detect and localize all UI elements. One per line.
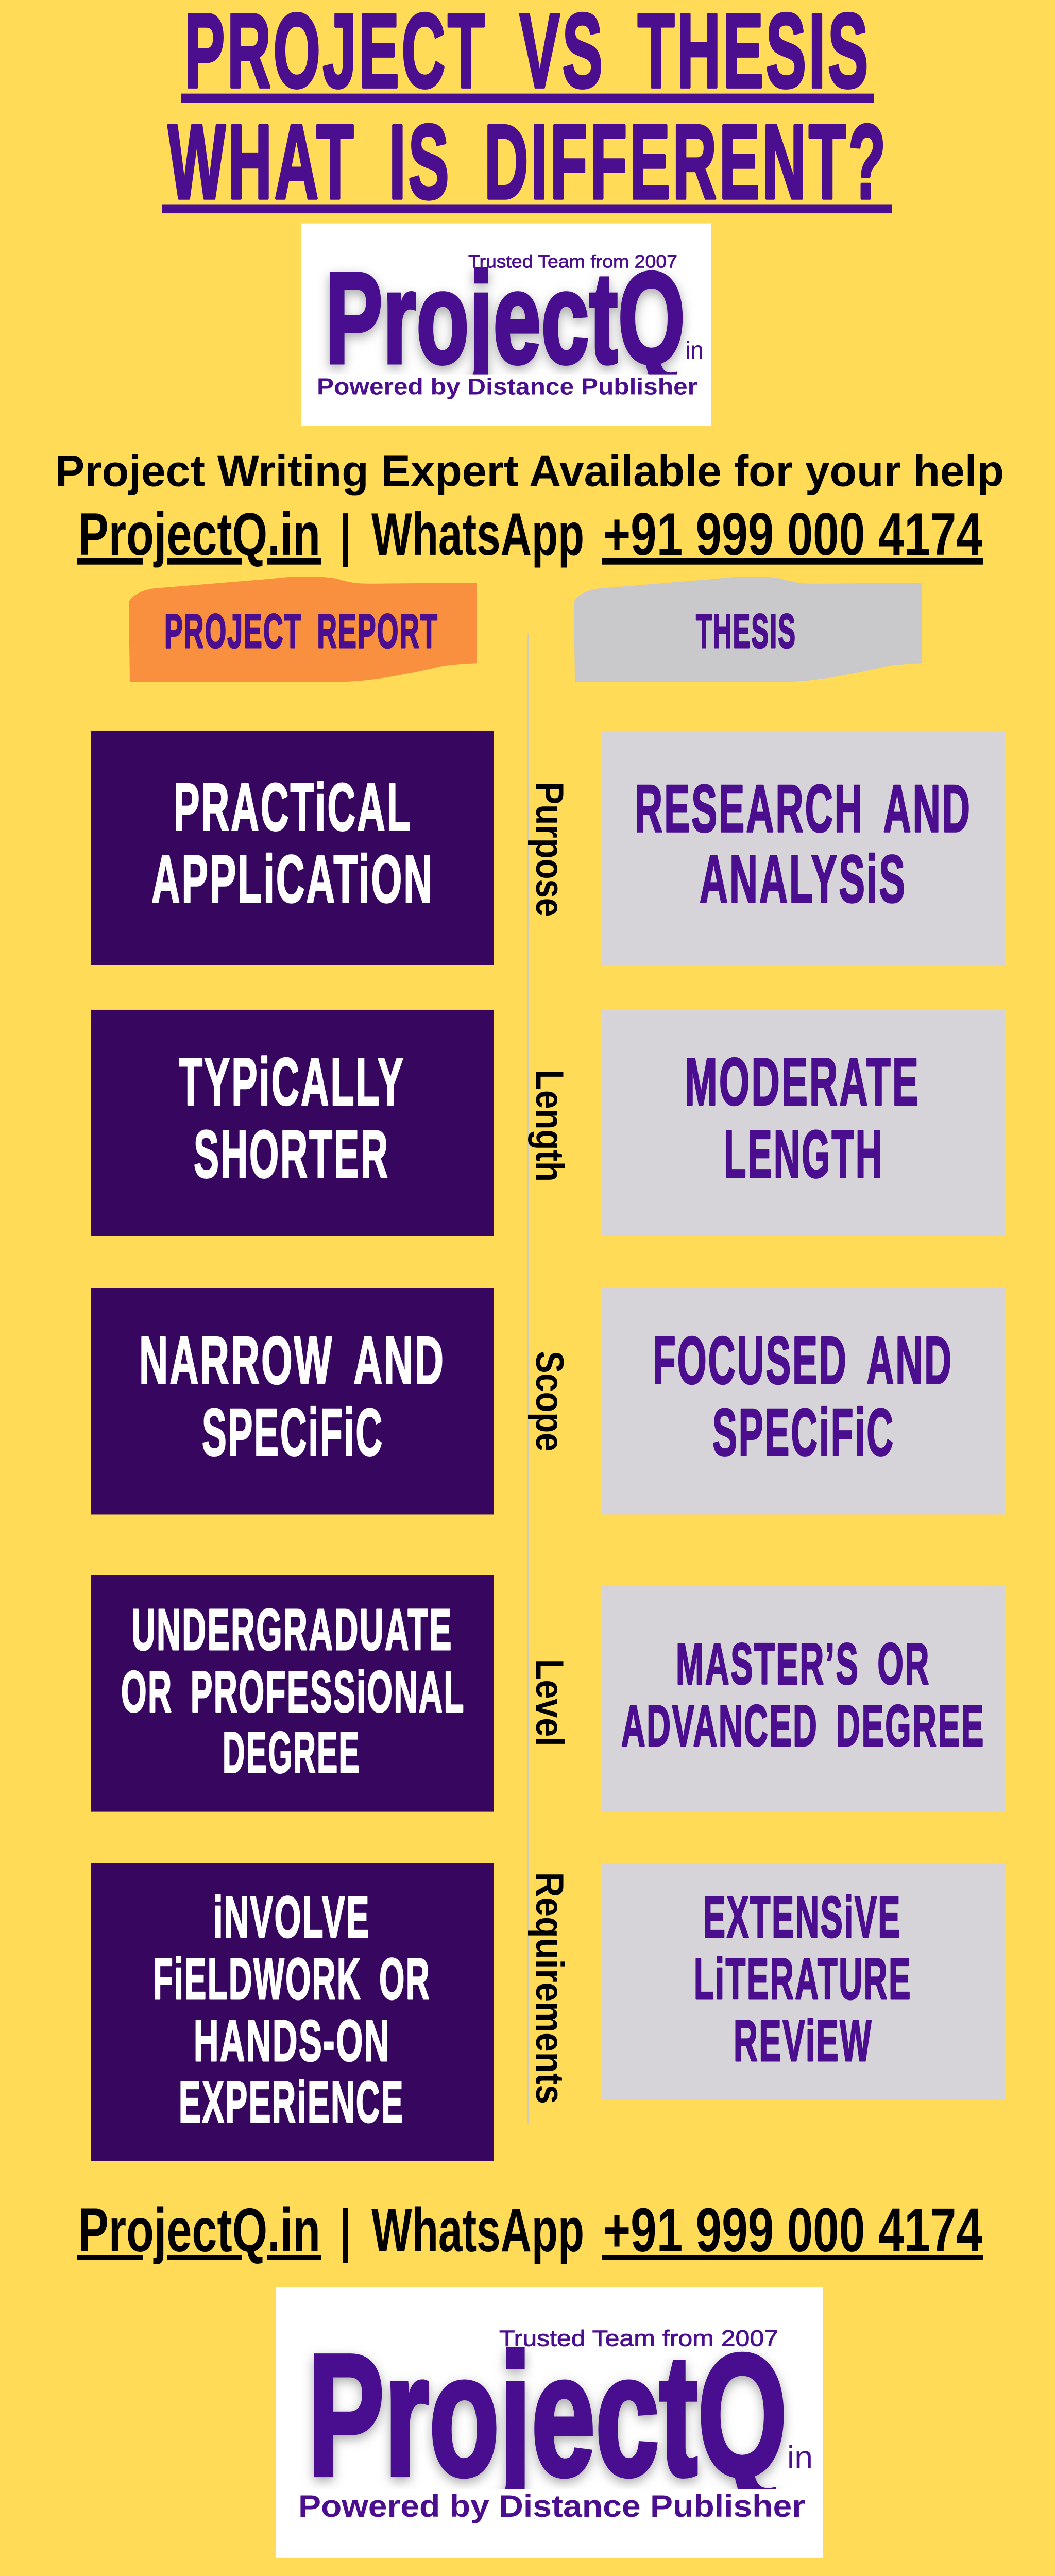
contact line: top: ProjectQ.in bbox=[78, 501, 320, 568]
label: purpose: Purpose bbox=[528, 782, 572, 917]
logo: bottom ProjectQ: Powered by Distance Publisher bbox=[298, 2488, 805, 2523]
header: project report: PROJECT REPORT bbox=[164, 604, 438, 658]
row: length, project: SHORTER bbox=[194, 1117, 389, 1192]
row: purpose, project bbox=[91, 731, 494, 965]
logo: bottom ProjectQ: ProjectQ bbox=[308, 2318, 787, 2513]
row: requirements, thesis: EXTENSiVE bbox=[703, 1885, 901, 1950]
label: length: Length bbox=[528, 1070, 572, 1182]
row: scope, thesis bbox=[602, 1288, 1005, 1514]
contact line: bottom: ProjectQ.in bbox=[78, 2195, 320, 2265]
row: requirements, project bbox=[91, 1863, 494, 2161]
row: requirements, project: FiELDWORK OR bbox=[153, 1946, 431, 2012]
row: purpose, thesis: ANALYSiS bbox=[700, 841, 907, 917]
row: length, thesis bbox=[602, 1010, 1005, 1236]
row: requirements, thesis: REViEW bbox=[734, 2008, 873, 2074]
logo: bottom ProjectQ: in bbox=[787, 2440, 813, 2476]
row: level, project: UNDERGRADUATE bbox=[131, 1597, 453, 1663]
row: length, project: TYPiCALLY bbox=[179, 1044, 405, 1120]
contact line: bottom: WhatsApp bbox=[371, 2195, 584, 2265]
row: level, project: DEGREE bbox=[223, 1720, 361, 1785]
contact line: top bbox=[77, 501, 983, 568]
row: requirements, project: HANDS-ON bbox=[194, 2008, 390, 2074]
row: level, project: OR PROFESSiONAL bbox=[121, 1659, 465, 1724]
tagline: Project Writing Expert Available for your help bbox=[55, 447, 1004, 496]
logo: top ProjectQ: ProjectQ bbox=[325, 246, 685, 391]
logo: top ProjectQ: Trusted Team from 2007 bbox=[468, 251, 677, 272]
row: scope, project bbox=[91, 1288, 494, 1514]
row: scope, project: SPECiFiC bbox=[202, 1395, 384, 1470]
row: level, project bbox=[91, 1575, 494, 1812]
row: level, thesis bbox=[602, 1585, 1005, 1812]
row: requirements, thesis bbox=[602, 1863, 1005, 2100]
logo: bottom ProjectQ: Trusted Team from 2007 bbox=[499, 2326, 778, 2351]
contact line: top: WhatsApp bbox=[371, 501, 584, 568]
row: length, project bbox=[91, 1010, 494, 1236]
label: requirements: Requirements bbox=[528, 1872, 572, 2104]
header: project report bbox=[129, 577, 477, 682]
row: length, thesis: LENGTH bbox=[724, 1117, 883, 1192]
title bbox=[162, 0, 892, 221]
label: scope: Scope bbox=[528, 1351, 572, 1451]
row: purpose, project: APPLiCATiON bbox=[151, 841, 434, 917]
header: thesis bbox=[574, 577, 922, 682]
row: purpose, project: PRACTiCAL bbox=[174, 770, 412, 845]
row: requirements, project: iNVOLVE bbox=[213, 1885, 370, 1950]
header: thesis: THESIS bbox=[696, 604, 796, 658]
logo: top ProjectQ bbox=[301, 224, 711, 426]
logo: bottom ProjectQ bbox=[276, 2287, 823, 2558]
logo: top ProjectQ: in bbox=[685, 336, 704, 364]
row: requirements, project: EXPERiENCE bbox=[179, 2070, 404, 2135]
row: scope, project: NARROW AND bbox=[139, 1323, 445, 1398]
row: scope, thesis: SPECiFiC bbox=[712, 1395, 895, 1470]
contact line: bottom bbox=[77, 2195, 983, 2265]
logo: top ProjectQ: Powered by Distance Publisher bbox=[317, 374, 697, 400]
row: purpose, thesis bbox=[602, 731, 1005, 966]
label: level: Level bbox=[528, 1659, 572, 1747]
